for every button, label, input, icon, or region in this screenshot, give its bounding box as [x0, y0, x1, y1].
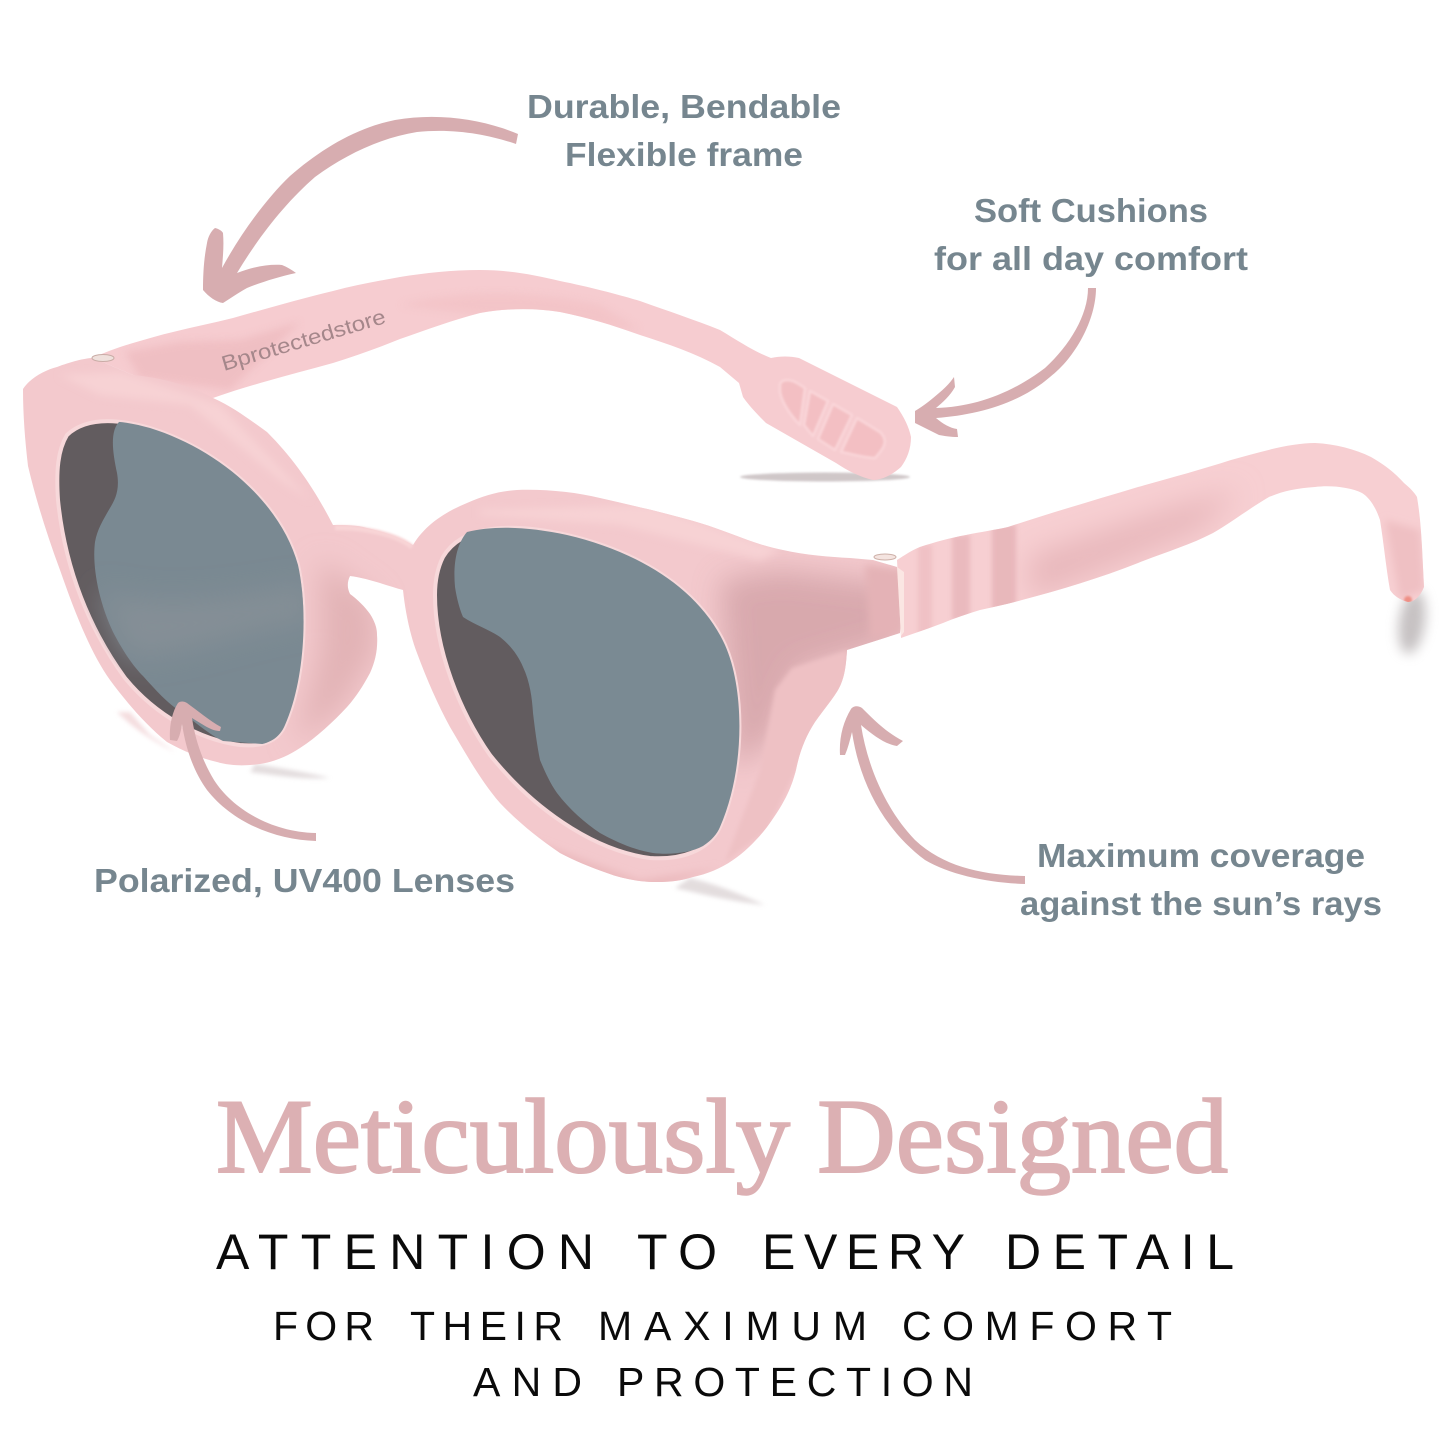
hinge strip	[897, 567, 904, 636]
label: soft cushions: Soft Cushions	[974, 192, 1208, 229]
left lens	[57, 420, 320, 745]
brand imprint: Bprotectedstore	[219, 305, 388, 376]
front frame	[23, 358, 905, 892]
arrow: to cushion	[915, 288, 1096, 437]
sunglasses illustration	[23, 270, 1429, 905]
label: maximum coverage: against the sun’s rays	[1020, 885, 1382, 922]
tagline: AND	[473, 1359, 582, 1405]
tagline	[273, 1303, 1172, 1405]
label: durable frame: Durable, Bendable	[527, 88, 841, 125]
subtitle: EVERY	[762, 1224, 965, 1280]
near temple arm	[874, 443, 1424, 638]
tagline: MAXIMUM	[598, 1303, 867, 1349]
label: soft cushions: for all day comfort	[934, 240, 1248, 277]
label: durable frame: Flexible frame	[565, 136, 803, 173]
subtitle: ATTENTION	[216, 1224, 594, 1280]
hinge rivet	[874, 554, 896, 560]
arrow: to frame	[203, 117, 518, 303]
tagline: COMFORT	[902, 1303, 1172, 1349]
label: lenses: Polarized, UV400 Lenses	[94, 862, 515, 899]
tagline: THEIR	[410, 1303, 563, 1349]
far temple arm with cushion tip	[93, 270, 911, 480]
label: maximum coverage	[1020, 837, 1382, 922]
subtitle: TO	[637, 1224, 717, 1280]
label: maximum coverage: Maximum coverage	[1037, 837, 1365, 874]
title: Meticulously Designed	[216, 1078, 1228, 1195]
cushion grip slots	[780, 380, 885, 458]
ground shadows	[117, 472, 1429, 905]
hinge rivet, far side	[92, 354, 114, 362]
subtitle: DETAIL	[1005, 1224, 1234, 1280]
label: durable frame	[527, 88, 841, 173]
bridge highlight	[335, 528, 412, 547]
subtitle	[216, 1224, 1234, 1280]
right lens	[435, 528, 739, 858]
tagline: PROTECTION	[617, 1359, 973, 1405]
arrow: to side coverage	[840, 706, 1025, 884]
tagline: FOR	[273, 1303, 374, 1349]
label: soft cushions	[934, 192, 1248, 277]
arrow: to lens	[170, 702, 316, 841]
